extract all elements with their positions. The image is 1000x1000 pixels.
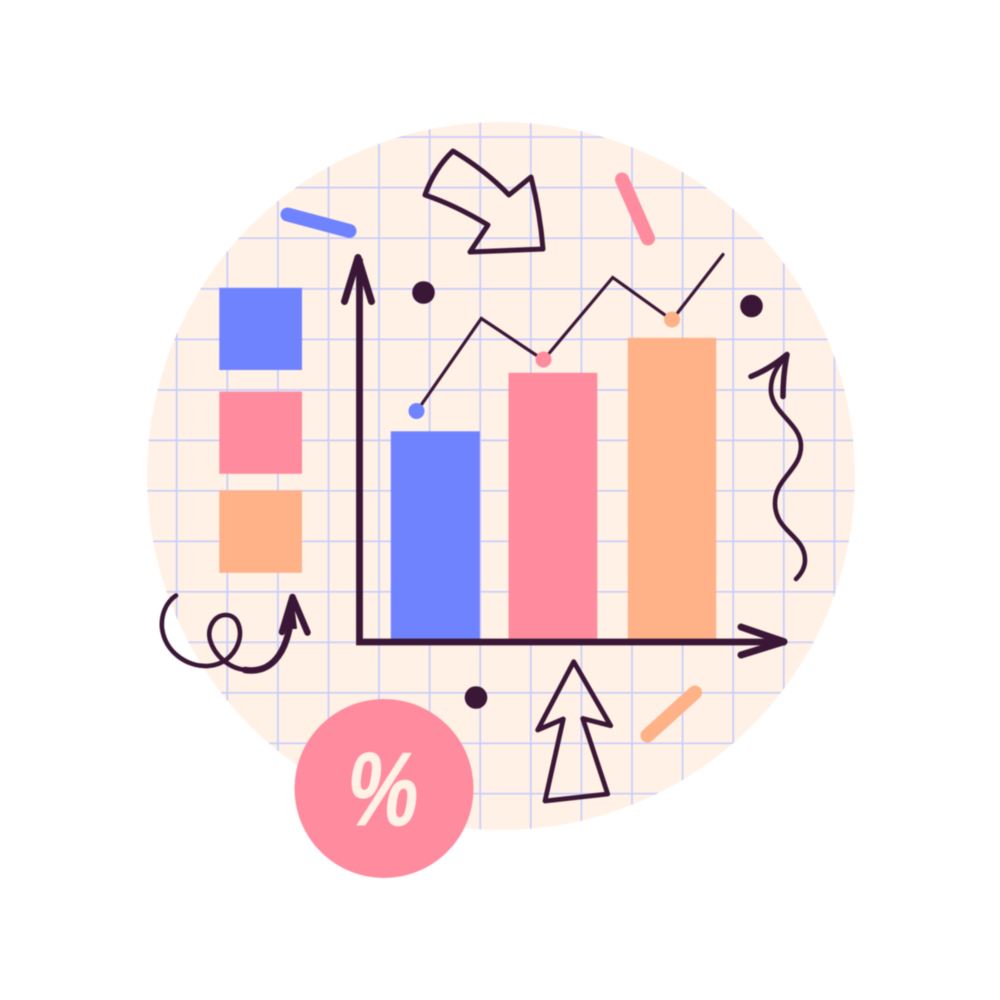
background circle (147, 122, 855, 830)
swatch: orange (219, 490, 302, 573)
bar: pink (508, 373, 597, 640)
point: blue (408, 403, 424, 419)
arrow: right squiggle (751, 354, 805, 579)
dot: top left (412, 281, 435, 304)
swatch: blue (219, 288, 302, 370)
percent badge (294, 699, 474, 878)
legend swatches (219, 288, 302, 573)
percent sign: % (340, 731, 428, 847)
arrow: bottom outline (538, 662, 611, 801)
arrow: top outline (425, 151, 543, 252)
point: pink (536, 352, 552, 368)
trend line (408, 254, 723, 419)
arrow: left curl (162, 596, 308, 670)
accent: pink pill (622, 180, 648, 238)
illustration (147, 122, 855, 879)
point: orange (664, 312, 680, 328)
bar chart (391, 338, 716, 640)
dot: bottom (465, 686, 487, 709)
bar: orange (628, 338, 716, 640)
swatch: pink (219, 392, 302, 474)
bar: blue (391, 431, 480, 640)
dot: right (740, 295, 763, 317)
accent: orange pill (648, 692, 695, 736)
accent: blue pill (288, 214, 350, 231)
chart axes (344, 258, 784, 655)
